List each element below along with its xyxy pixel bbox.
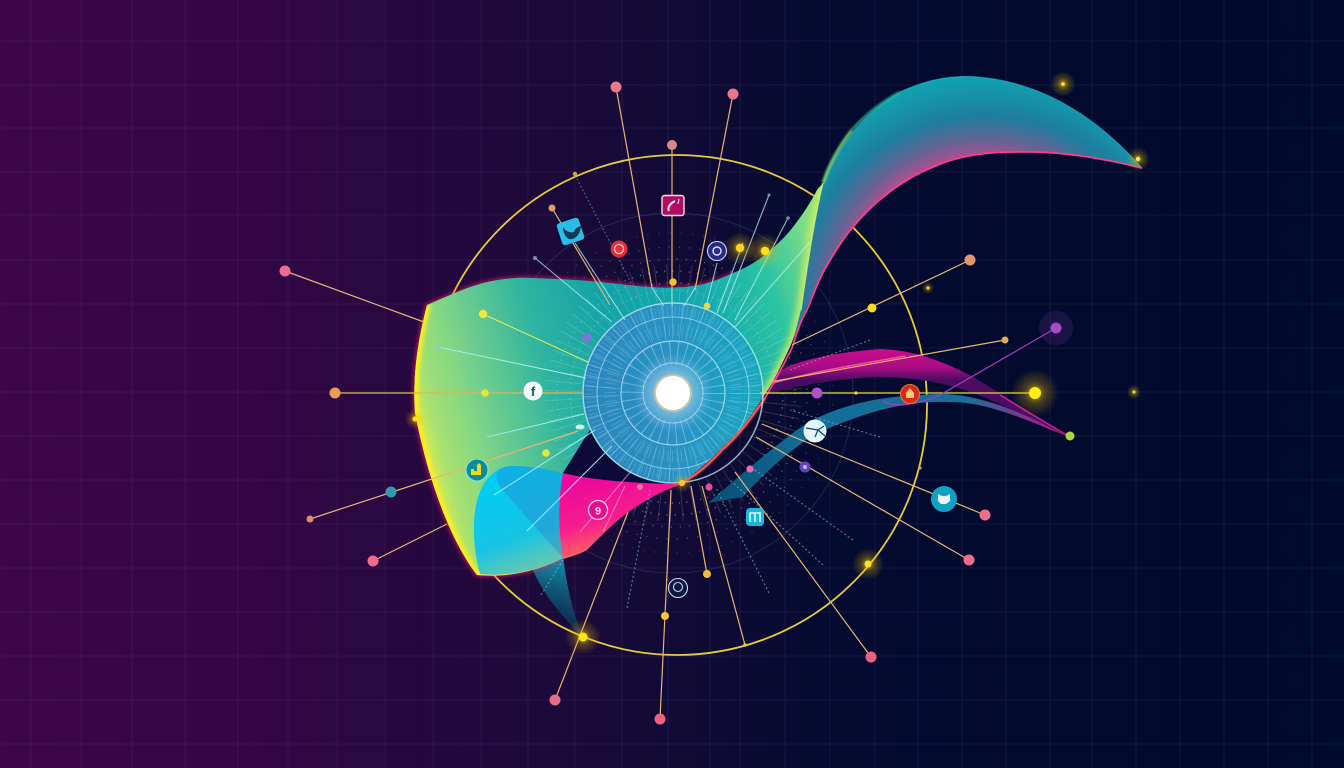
icon: violet node on axis: [812, 388, 822, 398]
orange spokes with end nodes: [285, 87, 1035, 719]
ribbon tail below petal: [530, 556, 583, 637]
ribbon: blue arc: [708, 394, 1066, 503]
thin spokes inside ribbon: [438, 175, 880, 608]
icon: magenta call tile: [662, 196, 684, 216]
icon: facebook badge: [524, 382, 542, 400]
icon: teal chart badge: [466, 459, 488, 481]
yellow glow halos: [405, 71, 1150, 655]
icon: violet small badge: [800, 462, 810, 472]
icon: indigo badge: [708, 242, 726, 260]
ribbon: magenta arc: [768, 349, 1068, 436]
ribbon: cyan petal: [474, 466, 563, 575]
icon: white network badge: [804, 420, 826, 442]
ribbon glow edge: [414, 273, 733, 576]
faint dotted rings around the hub: [493, 213, 853, 573]
icon: cyan tile: [746, 508, 764, 526]
network nodes: [280, 82, 1140, 724]
purple link line: [883, 328, 1056, 405]
ribbon: pink panel: [559, 473, 682, 559]
icon: twitter bird tile: [556, 217, 585, 246]
lime seam between wing and body: [801, 183, 823, 310]
icon: violet node on ribbon: [582, 333, 592, 343]
yellow orbit circle: [427, 155, 927, 655]
icon: dark ring badge: [668, 578, 688, 598]
icon: red orange badge: [900, 384, 920, 404]
icon: red badge: [610, 240, 628, 258]
pink outline along ribbon right edge: [680, 152, 1142, 483]
icon: cyan twitter badge: [931, 486, 957, 512]
icon: facebook badge: f: [531, 384, 536, 399]
icon: pink ring badge: [588, 500, 608, 520]
central hub dial: [583, 303, 763, 483]
upper wing of ribbon: [790, 76, 1142, 347]
magenta link line: [1000, 395, 1068, 436]
coral segment of right edge: [680, 398, 765, 483]
ribbon: dark gap between hub and pink panel: [563, 430, 680, 484]
icon: small white mark: [576, 424, 584, 430]
main ribbon: body: [414, 183, 823, 576]
icon: pink ring badge: 9: [595, 506, 601, 518]
